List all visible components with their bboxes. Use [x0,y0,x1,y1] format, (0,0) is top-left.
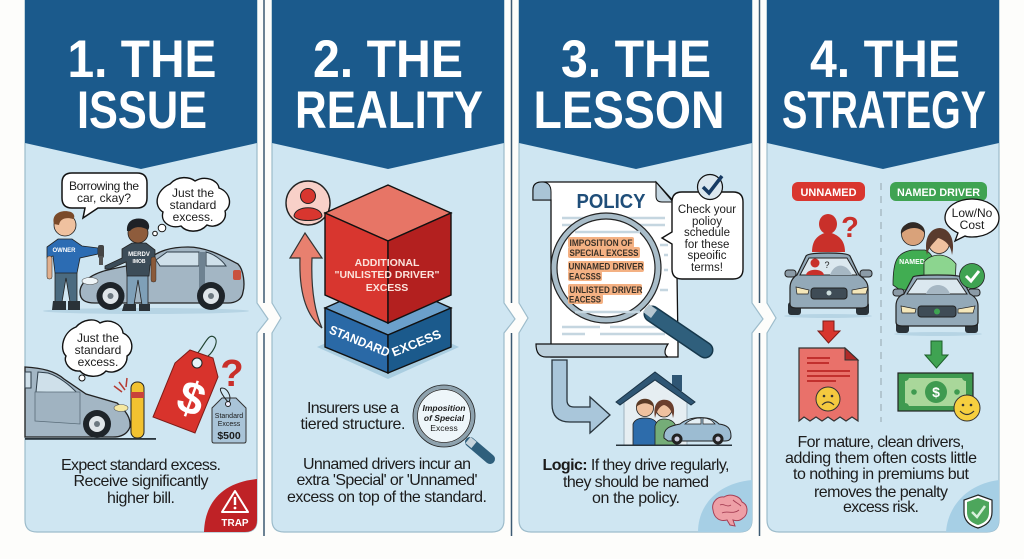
reality text: extra 'Special' or 'Unnamed' [296,472,478,489]
red price tag [153,336,244,433]
tiered structure text: Insurers use a [307,400,399,417]
standard excess small tag [212,388,246,443]
speech bubble [62,173,147,218]
column divider [880,183,882,422]
issue text [61,457,221,507]
trap badge: TRAP [221,518,249,529]
borrower figure: IMOB [132,259,146,265]
issue text: Expect standard excess. [61,457,221,474]
magnifier: imposition of special excess: Excess [430,423,458,433]
strategy text [785,434,977,516]
strategy text: to nothing in premiums but [793,466,970,483]
green arrow [925,341,948,368]
owner figure: OWNER [52,248,76,254]
tiered structure text: tiered structure. [300,416,406,433]
magnifying glass with highlighted terms: EACESS [569,294,601,304]
heading banner [767,0,999,169]
issue text: higher bill. [107,490,175,507]
standard excess block: EXCESS [390,327,443,360]
unnamed badge: UNNAMED [800,187,857,199]
red price tag: $ [171,369,212,427]
speech bubble: Borrowing the [69,179,139,193]
check schedule callout: for these [685,239,729,251]
thought cloud: standard [170,198,216,212]
check schedule callout: polioy [692,216,722,228]
check badge [960,264,984,288]
heading banner: 2. THE [313,30,463,89]
unknown person [812,212,859,252]
thought cloud: Just the [172,186,214,200]
speech bubble: car, ckay? [77,191,131,205]
check schedule callout: speoific [688,250,727,262]
sad face [816,387,840,411]
trap badge [204,479,257,532]
low cost bubble [945,199,999,241]
unlisted driver excess block: "UNLISTED DRIVER" [334,269,440,281]
reality text: Unnamed drivers incur an [303,456,471,473]
lesson text: Logic: If they drive regularly, [542,457,730,474]
low cost bubble: Cost [960,218,985,232]
couple: NAMED [899,259,925,266]
heading banner: 1. THE [68,30,216,89]
heading banner [519,0,752,169]
shield badge [946,480,999,532]
panel: 2. The Reality [272,0,515,532]
couple [633,399,676,445]
couple [893,222,956,290]
standard excess block [325,280,451,373]
thought cloud lower [63,320,132,381]
standard excess small tag: Excess [218,421,241,428]
issue text: Receive significantly [74,473,208,490]
standard excess small tag: Standard [215,413,243,420]
lesson text: they should be named [563,474,709,491]
magnifying glass with highlighted terms: SPECIAL EXCESS [570,248,638,258]
front car unnamed [784,253,872,318]
named driver badge: NAMED DRIVER [897,187,980,199]
penalty bill [799,348,858,421]
money note: $ [932,384,940,400]
lesson text [542,457,730,507]
thought cloud: excess. [173,210,213,224]
unnamed driver icon [286,181,330,225]
unlisted driver excess block: EXCESS [366,282,408,294]
check schedule callout [662,174,743,279]
policy document: POLICY [576,191,646,213]
stacked excess blocks [317,185,459,379]
named driver badge [890,182,987,201]
owner figure [47,211,104,310]
heading banner [25,0,257,169]
strategy text: For mature, clean drivers, [798,434,964,451]
red arrow [818,321,840,343]
thought cloud [153,178,230,236]
thought cloud lower: standard [75,343,121,357]
smiley [954,395,980,421]
standard excess small tag: $500 [217,430,241,442]
upward arrow [290,233,322,328]
crashed car into bollard [25,367,156,440]
magnifying glass with highlighted terms [551,213,705,350]
heading banner [272,0,504,169]
magnifying glass with highlighted terms: UNLISTED DRIVER [570,285,643,295]
check icon [698,174,722,200]
red price tag: ? [220,353,244,395]
tiered structure text [300,400,406,433]
unnamed column [784,182,872,421]
panel: 3. The Lesson [519,0,763,532]
strategy text: excess risk. [843,499,919,516]
heading banner: 3. THE [561,30,711,89]
unlisted driver excess block: ADDITIONAL [355,257,420,269]
heading banner: REALITY [295,81,483,140]
reality text: excess on top of the standard. [287,489,487,506]
money note [898,373,980,421]
low cost bubble: Low/No [952,206,993,220]
check schedule callout: terms! [691,262,723,274]
unnamed badge [792,182,865,201]
arrow to home [552,360,610,433]
magnifying glass with highlighted terms: EACSSS [569,272,601,282]
magnifier: imposition of special excess: of Special [424,413,465,423]
named column [890,182,999,421]
car with owner and borrower [43,211,249,314]
magnifier: imposition of special excess: Imposition [423,403,465,413]
heading banner: ISSUE [77,81,207,140]
panel: 1. The Issue [25,0,268,532]
check schedule callout: schedule [684,227,730,239]
heading banner: LESSON [534,81,724,140]
borrower figure: MERDV [128,252,150,258]
brain badge [698,480,752,532]
borrower figure [105,218,156,311]
small car [664,418,731,444]
magnifying glass with highlighted terms: IMPOSITION OF [570,238,633,248]
thought cloud lower: Just the [77,331,119,345]
unknown person: ? [841,212,859,244]
strategy text: removes the penalty [814,484,948,501]
thought cloud lower: excess. [78,355,118,369]
front car named [893,275,982,336]
heading banner: 4. THE [810,30,960,89]
reality text [287,456,487,506]
policy document [533,182,678,357]
standard excess block: STANDARD [327,323,392,360]
panel: 4. The Strategy [767,0,999,532]
unlisted driver excess block [325,185,451,323]
front car unnamed: ? [824,260,830,270]
check schedule callout: Check your [678,204,736,216]
magnifying glass with highlighted terms: UNNAMED DRIVER [568,262,644,272]
strategy text: adding them often costs little [785,450,977,467]
lesson text: on the policy. [592,490,680,507]
magnifier: imposition of special excess [413,385,490,459]
house with couple and car [616,372,732,446]
